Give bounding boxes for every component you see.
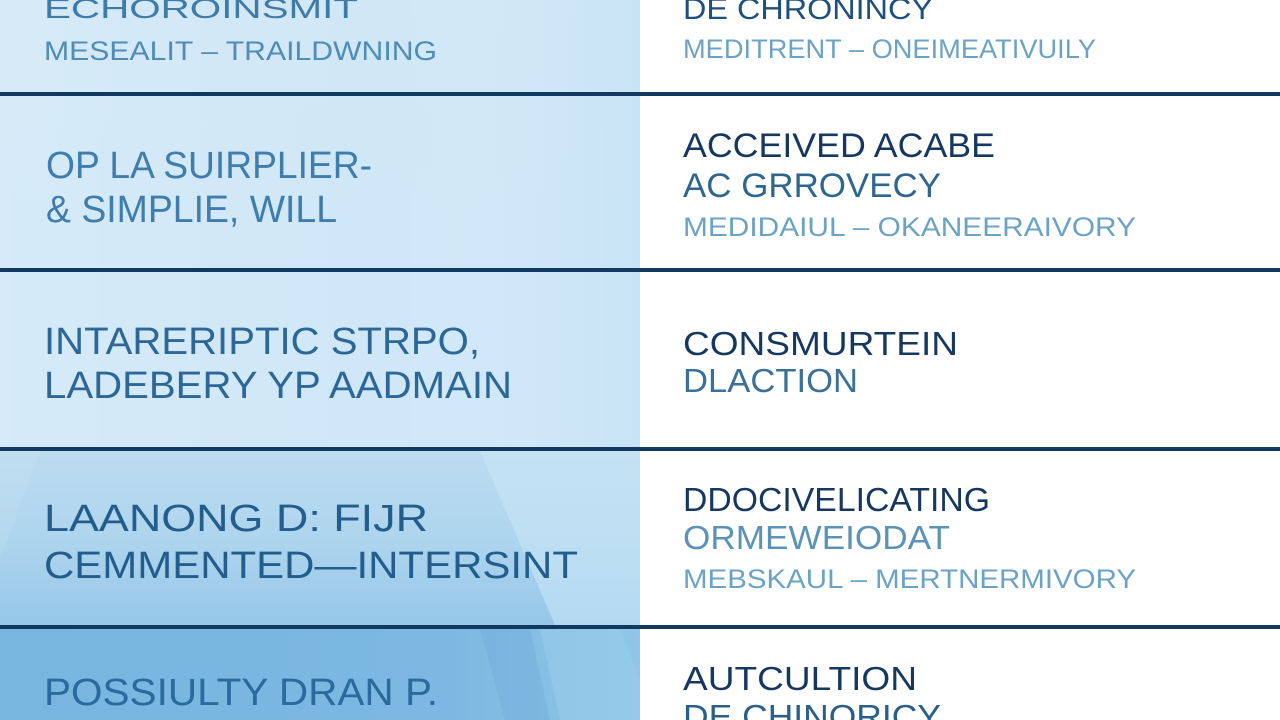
left label, row 2: & SIMPLIE, WILL — [46, 189, 337, 231]
divider 4 — [0, 625, 1280, 629]
row 3 — [44, 321, 958, 407]
right label, row 2: ACCEIVED ACABE — [683, 127, 995, 165]
right label, row 5 — [683, 660, 941, 720]
right label, row 2: AC GRROVECY — [683, 167, 941, 205]
right label, row 3: DLACTION — [683, 362, 858, 399]
right label, row 1: MEDITRENT – ONEIMEATIVUILY — [683, 34, 1096, 64]
row 1 — [44, 0, 1096, 66]
row 5 — [44, 660, 941, 720]
row 2 — [46, 127, 1136, 242]
divider 2 — [0, 268, 1280, 272]
left label, row 4: LAANONG D: FIJR — [44, 498, 428, 540]
right label, row 3: CONSMURTEIN — [683, 325, 958, 362]
right label, row 4: ORMEWEIODAT — [683, 519, 950, 556]
right label, row 1 — [683, 0, 1096, 64]
right label, row 4: DDOCIVELICATING — [683, 481, 990, 518]
left label, row 4: CEMMENTED—INTERSINT — [44, 545, 578, 587]
right label, row 3 — [683, 325, 958, 399]
left label, row 3: INTARERIPTIC STRPO, — [44, 321, 480, 363]
left label, row 1: MESEALIT – TRAILDWNING — [44, 36, 437, 66]
left label, row 3 — [44, 321, 512, 407]
right label, row 4: MEBSKAUL – MERTNERMIVORY — [683, 564, 1136, 594]
row 4 — [44, 481, 1136, 594]
right label, row 2 — [683, 127, 1136, 242]
panel: left shaded column — [0, 0, 640, 720]
left label, row 5: POSSIULTY DRAN P. — [44, 672, 438, 714]
divider 3 — [0, 447, 1280, 451]
left label, row 1 — [44, 0, 437, 66]
right label, row 4 — [683, 481, 1136, 594]
left label, row 2 — [46, 145, 372, 231]
left label, row 4 — [44, 498, 578, 587]
left label, row 2: OP LA SUIRPLIER- — [46, 145, 372, 187]
left label, row 3: LADEBERY YP AADMAIN — [44, 365, 512, 407]
right label, row 5: AUTCULTION — [683, 660, 917, 697]
divider 1 — [0, 92, 1280, 96]
right label, row 2: MEDIDAIUL – OKANEERAIVORY — [683, 212, 1136, 242]
